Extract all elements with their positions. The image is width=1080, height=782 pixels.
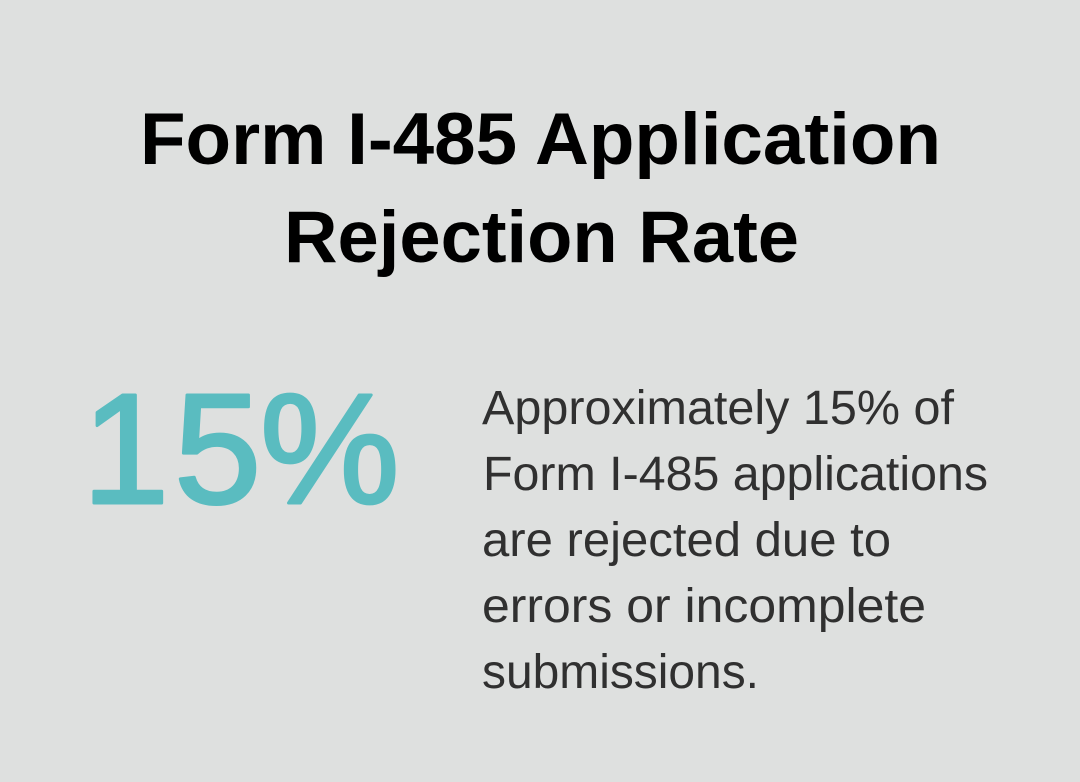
title: Rejection Rate [284, 197, 799, 278]
description text block: Approximately 15% of [482, 382, 955, 435]
big statistic: 15%: 15% [82, 362, 400, 537]
description text block [482, 382, 988, 699]
description text block: submissions. [482, 646, 759, 699]
title [140, 99, 941, 278]
description text block: are rejected due to [482, 514, 891, 567]
description text block: errors or incomplete [482, 580, 926, 633]
description text block: Form I-485 applications [483, 448, 988, 501]
title: Form I-485 Application [140, 99, 941, 180]
